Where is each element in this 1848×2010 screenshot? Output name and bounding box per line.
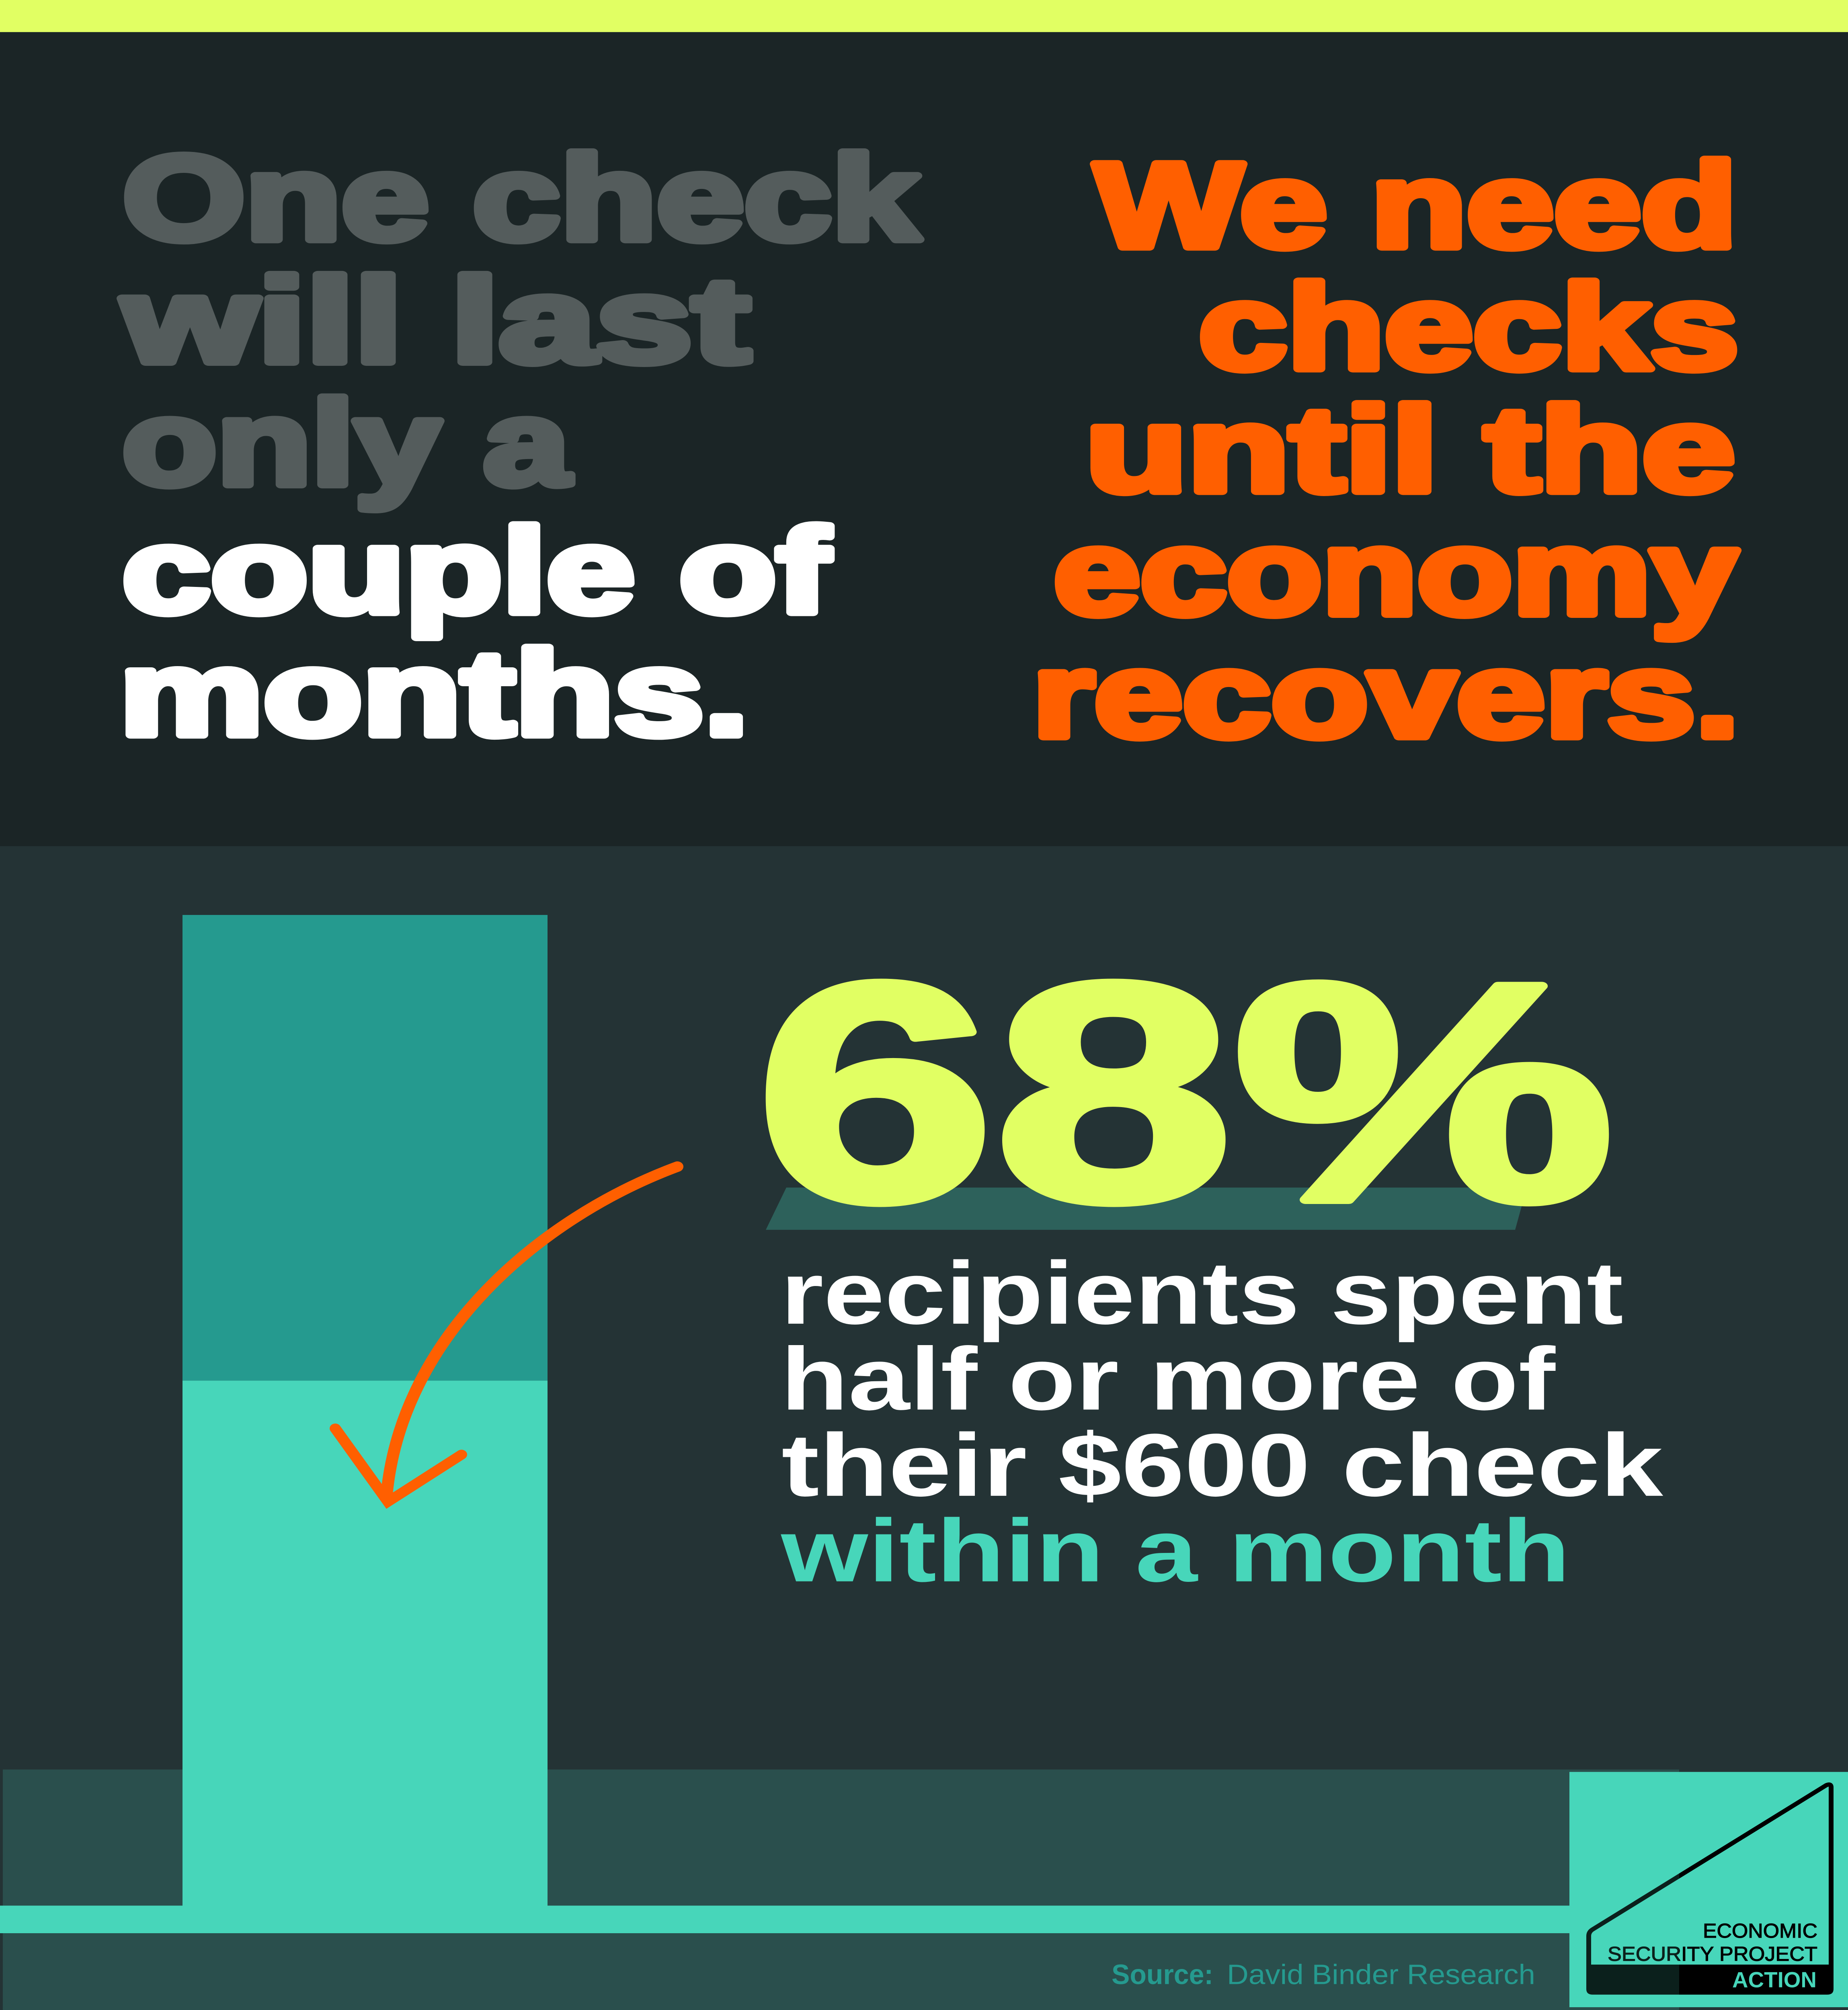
text block: recipients spent half or more of their check within a month: their $600 check xyxy=(781,1415,1663,1515)
heading: one check will last only a couple of months: months. xyxy=(119,626,749,761)
bar chart: 68 percent column xyxy=(183,915,548,1908)
source note: Source: xyxy=(1112,1959,1213,1990)
text block: recipients spent half or more of their check within a month: within a month xyxy=(781,1501,1570,1600)
panel: headline background xyxy=(0,32,1848,846)
logo background xyxy=(1569,1772,1848,2007)
heading: we need checks until the economy recovers xyxy=(1032,138,1739,762)
heading: one check will last only a couple of months: only a xyxy=(122,376,570,511)
top accent band xyxy=(0,0,1848,32)
heading: one check will last only a couple of months: One check xyxy=(123,131,920,265)
bar: full check xyxy=(183,915,548,1380)
statistic: 68 percent: 68% xyxy=(756,918,1614,1266)
logo: Economic Security Project Action xyxy=(1569,1772,1848,2007)
heading: one check will last only a couple of months xyxy=(119,131,920,761)
heading: we need checks until the economy recovers: checks xyxy=(1199,260,1739,394)
logo: Economic Security Project Action: SECURITY PROJECT xyxy=(1608,1942,1817,1965)
panel: statistic background xyxy=(0,846,1848,2010)
logo outline xyxy=(1589,1784,1831,1967)
heading: we need checks until the economy recovers: recovers. xyxy=(1032,628,1739,762)
text block: recipients spent half or more of their check within a month: recipients spent xyxy=(781,1243,1623,1343)
heading: one check will last only a couple of months: will last xyxy=(120,254,750,388)
logo action bar xyxy=(1586,1965,1834,1995)
text block: recipients spent half or more of their check within a month: half or more of xyxy=(781,1329,1556,1429)
arrow: from statistic to bar xyxy=(335,1167,677,1502)
heading: we need checks until the economy recovers: We need xyxy=(1095,138,1737,273)
logo wordmark: ECONOMIC xyxy=(1703,1920,1817,1942)
bar: 68 percent share xyxy=(183,1380,548,1908)
heading: we need checks until the economy recovers: until the xyxy=(1085,383,1735,517)
text block: recipients spent half or more of their check within a month xyxy=(781,1243,1663,1600)
source note: David Binder Research xyxy=(1227,1959,1535,1990)
heading: one check will last only a couple of months: couple of xyxy=(122,504,831,639)
logo: Economic Security Project Action: ACTION xyxy=(1732,1967,1817,1992)
baseline strip xyxy=(0,1905,1569,1933)
logo tint overlay xyxy=(1569,1772,1679,2007)
highlight behind statistic xyxy=(766,1188,1527,1230)
floor band xyxy=(3,1770,1679,2010)
heading: we need checks until the economy recovers: economy xyxy=(1054,506,1738,640)
